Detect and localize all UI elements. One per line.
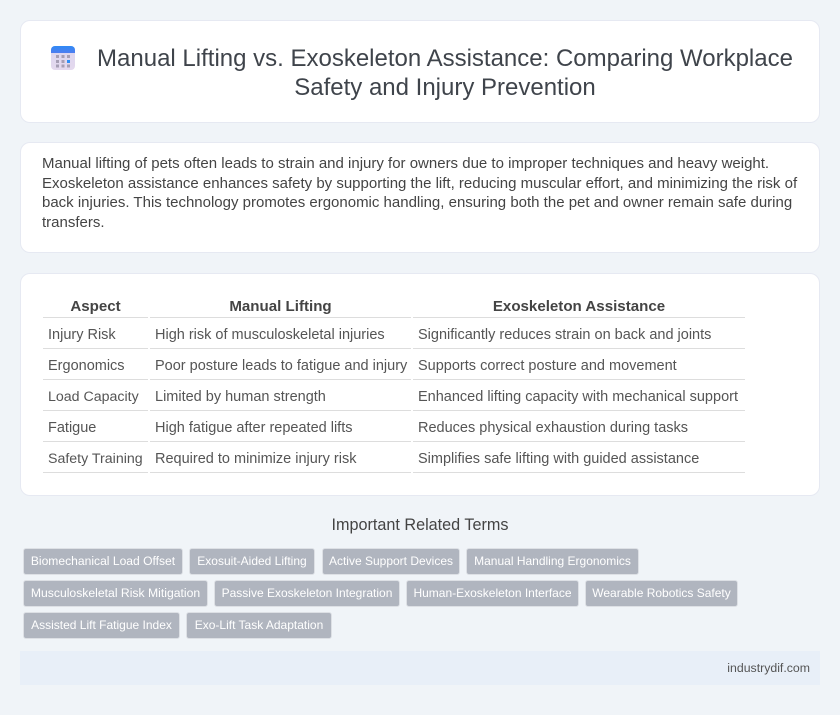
tag [23,612,180,639]
row: Load Capacity exoskeleton: Enhanced lifting capacity with mechanical support [418,389,738,405]
tag: Exosuit-Aided Lifting [197,554,307,568]
panel: title card [20,20,820,123]
row: Fatigue exoskeleton: Reduces physical exhaustion during tasks [418,420,688,436]
heading: Important Related Terms: Important Related Terms [332,516,508,534]
tag [23,548,183,575]
row: Safety Training manual: Required to minimize injury risk [155,451,356,467]
table header: Exoskeleton Assistance: Exoskeleton Assistance [493,298,665,315]
tag [466,548,639,575]
row: Injury Risk manual: High risk of musculoskeletal injuries [155,327,385,343]
row: Fatigue: Fatigue [48,420,96,436]
text block: introduction: Exoskeleton assistance enhances safety by supporting the lift, reducing muscular effort, and minimizing the risk of [42,174,797,192]
tag: Assisted Lift Fatigue Index [31,618,172,632]
text block: introduction: Manual lifting of pets often leads to strain and injury for owners due to improper techniques and heavy weight. [42,155,769,172]
row: Ergonomics manual: Poor posture leads to fatigue and injury [155,358,407,374]
text block: introduction: transfers. [42,214,105,230]
tag: Biomechanical Load Offset [31,554,175,568]
tag [189,548,315,575]
tag: Exo-Lift Task Adaptation [195,618,323,632]
row: Injury Risk: Injury Risk [48,327,116,343]
tag [186,612,332,639]
tag: Wearable Robotics Safety [592,586,731,600]
title [97,45,793,101]
tag [23,580,208,607]
text block: introduction: back injuries. This technology promotes ergonomic handling, ensuring both the pet and owner remain safe during [42,194,792,211]
row: Load Capacity manual: Limited by human strength [155,389,326,405]
panel: comparison table [20,273,820,496]
row: Load Capacity: Load Capacity [48,389,139,405]
icon: calendar [51,46,75,70]
table header: Aspect: Aspect [70,298,121,315]
row: Safety Training exoskeleton: Simplifies safe lifting with guided assistance [418,451,699,467]
tag: Musculoskeletal Risk Mitigation [31,586,200,600]
tag [585,580,738,607]
panel: introduction [20,142,820,253]
tag: Active Support Devices [329,554,453,568]
tag [322,548,460,575]
tag group: related terms [23,548,738,639]
row: Fatigue manual: High fatigue after repeated lifts [155,420,352,436]
tag: Manual Handling Ergonomics [474,554,631,568]
footer: source: industrydif.com [727,661,810,675]
table header: Manual Lifting: Manual Lifting [229,298,332,315]
text block: introduction [42,155,798,230]
row: Injury Risk exoskeleton: Significantly reduces strain on back and joints [418,327,711,343]
tag [406,580,579,607]
tag: Human-Exoskeleton Interface [413,586,572,600]
footer bar [20,651,820,685]
tag [214,580,400,607]
row: Safety Training: Safety Training [48,451,143,467]
row: Ergonomics exoskeleton: Supports correct posture and movement [418,358,677,374]
title: Manual Lifting vs. Exoskeleton Assistance: Comparing Workplace [97,45,793,72]
tag: Passive Exoskeleton Integration [222,586,392,600]
title: Safety and Injury Prevention [294,74,596,101]
row: Ergonomics: Ergonomics [48,358,125,374]
